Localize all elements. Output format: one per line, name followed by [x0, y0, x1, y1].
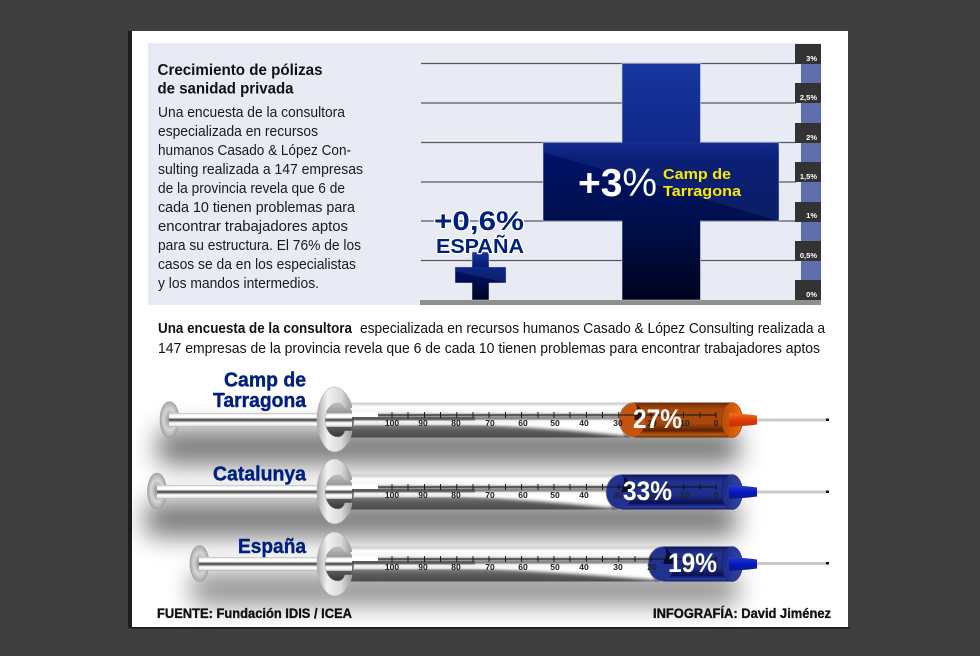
scale: 0: [714, 418, 719, 428]
axis: percentage tabs: 3%: [806, 54, 817, 63]
label: España: España: [238, 535, 307, 558]
syringe: España 19%: 19%: [668, 548, 717, 578]
syringe: España 19%: 10: [680, 562, 690, 572]
axis: percentage tabs: 1,5%: [800, 172, 817, 181]
text block: survey summary: Una encuesta de la consultora: [158, 104, 346, 121]
text block: survey summary: y los mandos intermedios.: [158, 275, 319, 292]
syringe: España 19%: 40: [579, 562, 589, 572]
heading: crecimiento de pólizas: [158, 62, 323, 98]
text block: survey summary: cada 10 tienen problemas para: [158, 199, 356, 216]
axis: percentage tabs: 2%: [806, 133, 817, 142]
scale: 50: [550, 418, 560, 428]
label: Camp de Tarragona: Tarragona: [213, 389, 307, 412]
scale: 10: [680, 418, 690, 428]
syringe: España 19%: 60: [518, 562, 528, 572]
axis: percentage tabs: [795, 44, 821, 300]
axis: percentage tabs: 0,5%: [800, 251, 817, 260]
label: +0,6% España: +0,6%: [434, 206, 524, 236]
label: Camp de Tarragona: Camp de: [224, 368, 306, 392]
syringe: Camp de Tarragona 27%: [160, 387, 829, 452]
syringe: Catalunya 33%: 33%: [623, 476, 672, 506]
syringe: Catalunya 33%: 90: [418, 490, 428, 500]
label: +3%: +3%: [578, 162, 657, 205]
text block: survey summary: para su estructura. El 76% de los: [158, 237, 361, 254]
scale: 60: [518, 418, 528, 428]
text block: survey summary: humanos Casado & López Con-: [158, 142, 351, 159]
label: Catalunya: Catalunya: [213, 462, 307, 486]
small cross: España +0,6%: [455, 252, 506, 300]
text block: lead paragraph: [158, 321, 826, 357]
scale: 90: [418, 418, 428, 428]
syringe shadows: [146, 430, 738, 604]
heading: crecimiento de pólizas: de sanidad privada: [158, 80, 294, 98]
barrel: [340, 402, 630, 438]
label: +0,6% España: ESPAÑA: [436, 235, 524, 258]
page sheet: [128, 31, 850, 629]
text block: lead paragraph: Una encuesta de la consultora: [158, 321, 353, 337]
syringe: España 19%: 0: [714, 562, 719, 572]
scale: 20: [647, 418, 657, 428]
source credit: FUENTE: Fundación IDIS / ICEA: [157, 606, 352, 621]
axis: percentage tabs: 1%: [806, 211, 817, 220]
syringe: Catalunya 33%: 60: [518, 490, 528, 500]
syringe: España 19%: 90: [418, 562, 428, 572]
author credit: INFOGRAFÍA: David Jiménez: [653, 606, 831, 621]
scale: 100: [385, 418, 399, 428]
heading: crecimiento de pólizas: Crecimiento de pólizas: [158, 62, 323, 79]
syringe: España 19%: [190, 532, 829, 596]
syringe: España 19%: 80: [451, 562, 461, 572]
axis: percentage tabs: 0%: [806, 290, 817, 299]
syringe: Catalunya 33%: 40: [579, 490, 589, 500]
flange: [317, 387, 352, 452]
syringe: España 19%: 20: [647, 562, 657, 572]
scale: 30: [613, 418, 623, 428]
syringe: España 19%: 70: [485, 562, 495, 572]
panel: growth of private health policies: [148, 43, 821, 305]
syringe: España 19%: 100: [385, 562, 399, 572]
text block: lead paragraph: 147 empresas de la provincia revela que 6 de cada 10 tienen problemas para encontrar trabajadores aptos: [158, 341, 820, 357]
label: Camp de Tarragona: [663, 167, 742, 200]
syringe: Catalunya 33%: 100: [385, 490, 399, 500]
syringe: España 19%: 30: [613, 562, 623, 572]
scale: [378, 412, 719, 428]
chart: percentage scale and crosses: [420, 44, 821, 305]
label: Camp de Tarragona: Tarragona: [663, 184, 742, 200]
label: Camp de Tarragona: Camp de: [663, 167, 731, 183]
scale: 40: [579, 418, 589, 428]
liquid: orange 27%: [634, 402, 732, 438]
syringe: Catalunya 33%: 20: [647, 490, 657, 500]
syringe: Catalunya 33%: 70: [485, 490, 495, 500]
text block: survey summary: especializada en recursos: [158, 123, 318, 140]
syringe: Catalunya 33%: 50: [550, 490, 560, 500]
label: +0,6% España: [434, 206, 524, 258]
axis: percentage tabs: 2,5%: [800, 93, 817, 102]
value: 27%: [633, 404, 682, 434]
syringe: Catalunya 33%: [148, 459, 829, 524]
text block: survey summary: encontrar trabajadores aptos: [158, 218, 348, 235]
label: Camp de Tarragona: [213, 368, 307, 412]
text block: survey summary: [158, 104, 363, 292]
scale: 80: [451, 418, 461, 428]
large cross: Camp de Tarragona +3%: [543, 64, 779, 300]
syringe: Catalunya 33%: 10: [680, 490, 690, 500]
syringe: Catalunya 33%: 30: [613, 490, 623, 500]
syringe: Catalunya 33%: 80: [451, 490, 461, 500]
syringe: Catalunya 33%: 0: [714, 490, 719, 500]
plunger: [160, 402, 179, 438]
syringe: España 19%: 50: [550, 562, 560, 572]
text block: lead paragraph: especializada en recursos humanos Casado & López Consulting realizada a: [360, 321, 826, 337]
text block: survey summary: sulting realizada a 147 empresas: [158, 161, 363, 178]
scale: 70: [485, 418, 495, 428]
text block: survey summary: casos se da en los especialistas: [158, 256, 356, 273]
text block: survey summary: de la provincia revela que 6 de: [158, 180, 345, 197]
nozzle and needle: [729, 413, 757, 427]
